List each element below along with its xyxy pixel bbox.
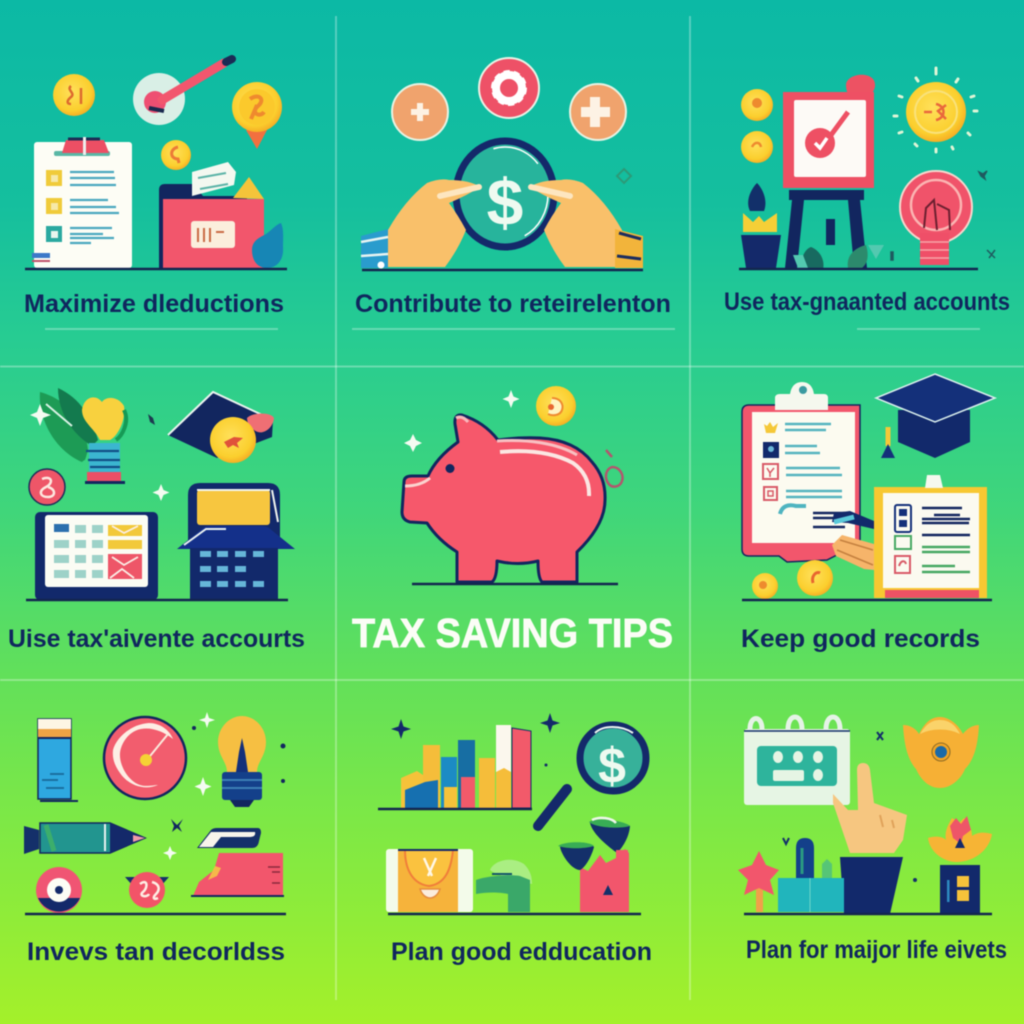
label: Invevs tan decorldss [27, 938, 285, 966]
icon: sun coin [894, 68, 977, 152]
small mark [148, 414, 155, 425]
label: Contribute to reteirelenton [355, 290, 671, 318]
title: TAX SAVING TIPS [352, 610, 673, 656]
ground line [362, 269, 643, 271]
icon: gauge [104, 717, 186, 799]
icon: gear circle [479, 58, 539, 118]
panel: keep good records [741, 374, 995, 653]
icon: pink truck [191, 853, 284, 896]
panel: centre piggy bank and title [352, 386, 673, 656]
icon: red folder [159, 162, 264, 268]
icon: dollar ring: $ [487, 165, 523, 239]
ground line [412, 583, 618, 585]
icon: coins [752, 560, 833, 599]
icon: small coin [161, 140, 191, 170]
bar chart [378, 725, 532, 809]
ground line [26, 599, 288, 601]
icon: magnifier: $ [598, 738, 626, 794]
panel: plan good education [378, 713, 652, 966]
ground line [739, 268, 978, 270]
icon: eraser [197, 828, 261, 848]
icon: coins [741, 89, 773, 163]
label: Uise tax'aivente accourts [8, 625, 305, 653]
icon: blue jar [38, 719, 78, 801]
icon: yellow clipboard [874, 475, 987, 598]
label: Plan good edducation [391, 938, 652, 966]
icon: pen [24, 823, 145, 854]
panel: tax-advantage accounts [8, 388, 305, 653]
icon: star [738, 851, 779, 912]
ground line [25, 913, 286, 915]
icon: pointing hand [833, 763, 907, 853]
icon: sparkles [30, 404, 170, 501]
sparkles [391, 713, 560, 766]
icon: pen on disc [133, 59, 232, 125]
sparkles [163, 712, 215, 860]
ground line [742, 599, 992, 601]
icon: calculator [177, 483, 295, 600]
icon: green shape [476, 860, 532, 912]
label: Maximize dleductions [24, 290, 284, 318]
panel: maximize deductions [24, 59, 287, 318]
icon: flower pot [928, 816, 992, 913]
icon: dollar ring [456, 141, 554, 247]
label: Keep good records [741, 625, 980, 653]
icon: coin left [53, 74, 95, 116]
icon: red light bulb [900, 171, 972, 265]
sparks [783, 732, 916, 881]
sparks [171, 726, 286, 832]
icon: round badge [36, 867, 82, 913]
icon: orange mask [903, 717, 979, 788]
panel: invest tax deductions [24, 712, 286, 966]
icon: red coin [29, 469, 65, 505]
icon: checklist clipboard [32, 137, 132, 268]
icon: sleeve [840, 857, 903, 914]
icon: calendar [744, 717, 850, 805]
icon: magnifier [538, 725, 646, 826]
icon: small plants [793, 245, 884, 270]
icon: teal box [778, 878, 844, 912]
icon: pig coin [125, 872, 169, 908]
icon: sparkles [404, 390, 520, 452]
icon: graduation cap [876, 374, 995, 458]
icon: pen and hand [780, 505, 874, 570]
sparks [891, 171, 995, 260]
icon: coin pin [232, 82, 282, 149]
icon: potted plant [741, 183, 781, 268]
panel: contribute to retirement [355, 58, 671, 318]
icon: red clipboard [742, 382, 860, 562]
icon: bottle [796, 838, 832, 878]
icon: plus circle left [392, 84, 448, 140]
icon: flower stack [40, 388, 126, 484]
icon: check board [783, 75, 875, 188]
ground line [388, 913, 641, 915]
icon: piggy bank [402, 415, 623, 582]
icon: light bulb [218, 716, 266, 807]
icon: left hand [361, 179, 480, 268]
icon: blue drop [252, 223, 283, 268]
icon: red stand with bowls [558, 818, 630, 912]
panel: plan for major life events [738, 717, 1007, 964]
icon: easel legs [785, 190, 867, 268]
icon: graduation cap with coin [168, 392, 274, 463]
icon: coin [536, 386, 576, 426]
icon: right hand [530, 179, 643, 268]
icon: small diamond [617, 169, 631, 183]
ground line [25, 268, 287, 270]
icon: spreadsheet tablet [35, 512, 158, 600]
ground line [744, 913, 992, 915]
icon: orange bag [386, 849, 473, 912]
panel: tax-advantaged accounts [724, 68, 1010, 316]
icon: plus circle right [570, 84, 626, 140]
